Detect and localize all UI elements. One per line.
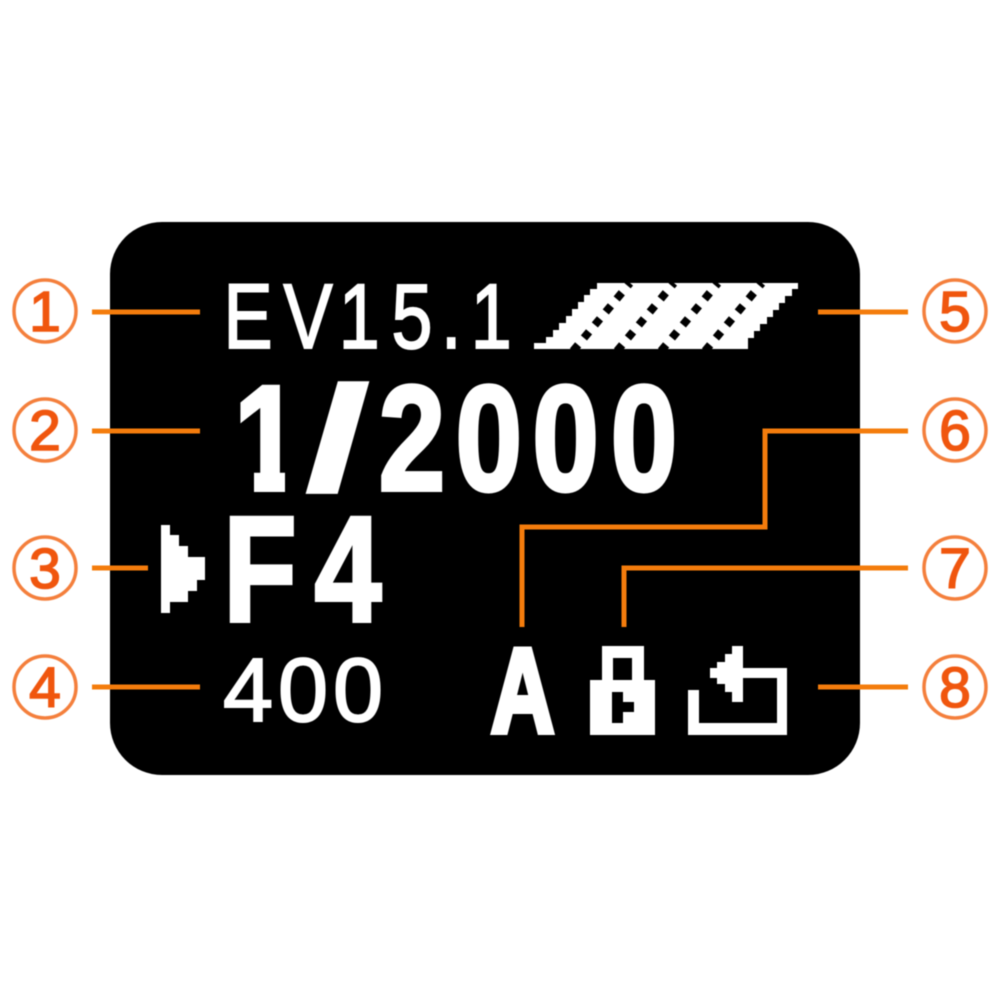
icon: exposure meter bar	[534, 283, 798, 351]
icon: selection triangle	[161, 525, 205, 613]
leader 2	[92, 428, 200, 434]
leader lines	[92, 312, 908, 687]
leader 4	[92, 684, 200, 690]
icon: return arrow	[688, 646, 787, 735]
digits 2000: 2000	[379, 354, 677, 522]
foot trim of digit one	[224, 466, 302, 498]
leader 3	[92, 566, 148, 570]
callout 7	[924, 537, 986, 601]
readout: ISO: 400	[223, 641, 383, 741]
callout 1: 1	[29, 280, 61, 344]
callout 8	[924, 656, 986, 720]
callout 4	[14, 656, 76, 720]
callout 2: 2	[29, 399, 61, 463]
leader 7	[624, 568, 908, 627]
slash: /	[307, 358, 368, 520]
readout: exposure value: EV15.1	[223, 265, 512, 368]
leader 6	[522, 431, 908, 627]
callout 8: 8	[939, 656, 971, 720]
callout 3: 3	[29, 537, 61, 601]
leader 1	[92, 310, 200, 314]
callout 2	[14, 399, 76, 463]
callout 4: 4	[29, 656, 61, 720]
icon: auto exposure mode letter: A	[491, 625, 554, 758]
callout 5: 5	[939, 280, 971, 344]
readout: aperture: F4	[223, 485, 381, 653]
callout 6: 6	[939, 399, 971, 463]
callout 3	[14, 537, 76, 601]
panel: black display	[110, 222, 860, 775]
callout 7: 7	[939, 537, 971, 601]
callout 1	[14, 280, 76, 344]
icon: padlock	[590, 646, 655, 735]
callout 5	[924, 280, 986, 344]
readout: shutter speed	[224, 354, 677, 522]
digit one: 1	[234, 354, 301, 522]
leader 8	[818, 684, 908, 690]
leader 5	[818, 310, 908, 314]
callout 6	[924, 399, 986, 463]
